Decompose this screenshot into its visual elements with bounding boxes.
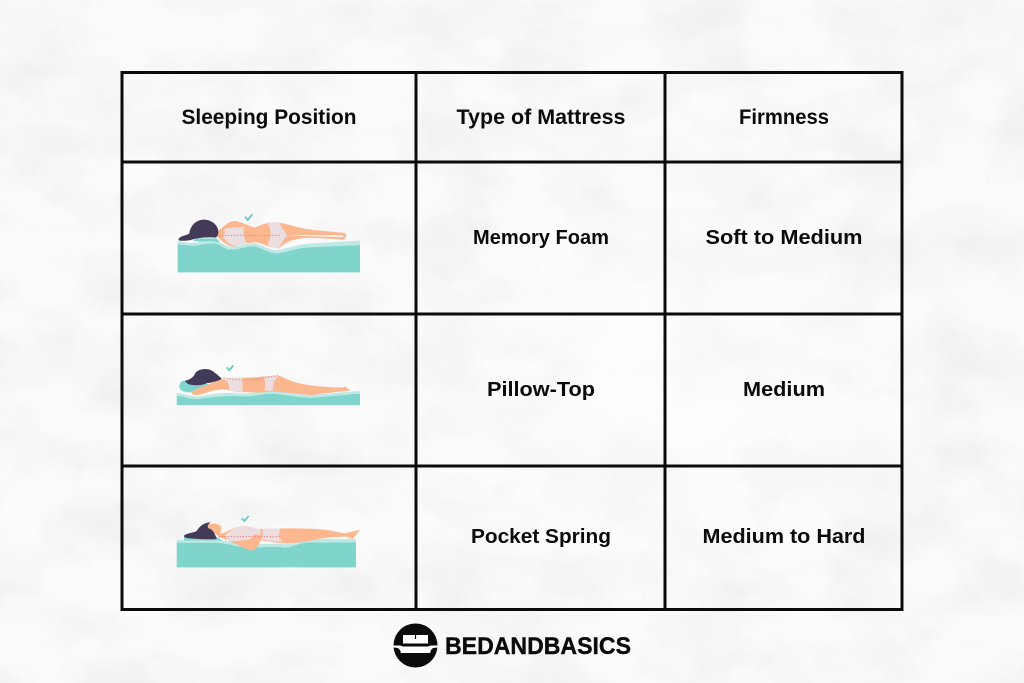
header: Firmness: Firmness (739, 106, 829, 129)
sofa back (403, 635, 428, 644)
comparison table (122, 72, 902, 610)
wordmark: BEDANDBASICS (445, 633, 631, 660)
mattress (178, 243, 360, 272)
mattress (177, 394, 360, 405)
illustration: stomach sleeper on pillow-top mattress (177, 365, 360, 405)
mattress top layer (177, 390, 360, 399)
spine guide (219, 535, 281, 538)
head and body (206, 524, 360, 551)
underwear (261, 528, 282, 542)
cell: Pocket Spring: Pocket Spring (471, 526, 611, 548)
mattress top layer (177, 539, 356, 548)
cell: Medium to Hard: Medium to Hard (702, 526, 866, 548)
spine guide (223, 376, 278, 380)
illustration: side sleeper on soft mattress (178, 214, 360, 272)
top (223, 378, 243, 392)
sofa seat and arms (394, 646, 438, 653)
check mark (245, 214, 252, 220)
header: Sleeping Position: Sleeping Position (182, 106, 356, 129)
icon: sofa in circle (394, 624, 438, 668)
gap between legs (287, 235, 343, 237)
bra (223, 227, 247, 246)
mattress (177, 542, 356, 567)
hair (185, 369, 222, 385)
check mark (227, 365, 233, 370)
cell: Soft to Medium: Soft to Medium (706, 227, 862, 249)
cell: Pillow-Top: Pillow-Top (487, 379, 595, 401)
cell: Medium: Medium (743, 379, 825, 401)
header: Type of Mattress: Type of Mattress (456, 106, 626, 129)
illustration: back sleeper on firm mattress (177, 516, 360, 567)
pillow (193, 238, 220, 242)
spine guide (219, 234, 280, 237)
check mark (242, 516, 249, 521)
mattress top layer (178, 240, 360, 253)
cell: Memory Foam: Memory Foam (473, 227, 609, 249)
pillow (184, 535, 223, 540)
shirt (225, 526, 261, 541)
underwear (264, 376, 279, 391)
table grid (122, 72, 902, 610)
hair (178, 220, 218, 241)
logo: Bedandbasics (394, 624, 631, 668)
body (217, 221, 347, 248)
underwear (267, 222, 287, 249)
body (192, 376, 351, 395)
hair (184, 522, 217, 539)
pillow (179, 380, 214, 392)
